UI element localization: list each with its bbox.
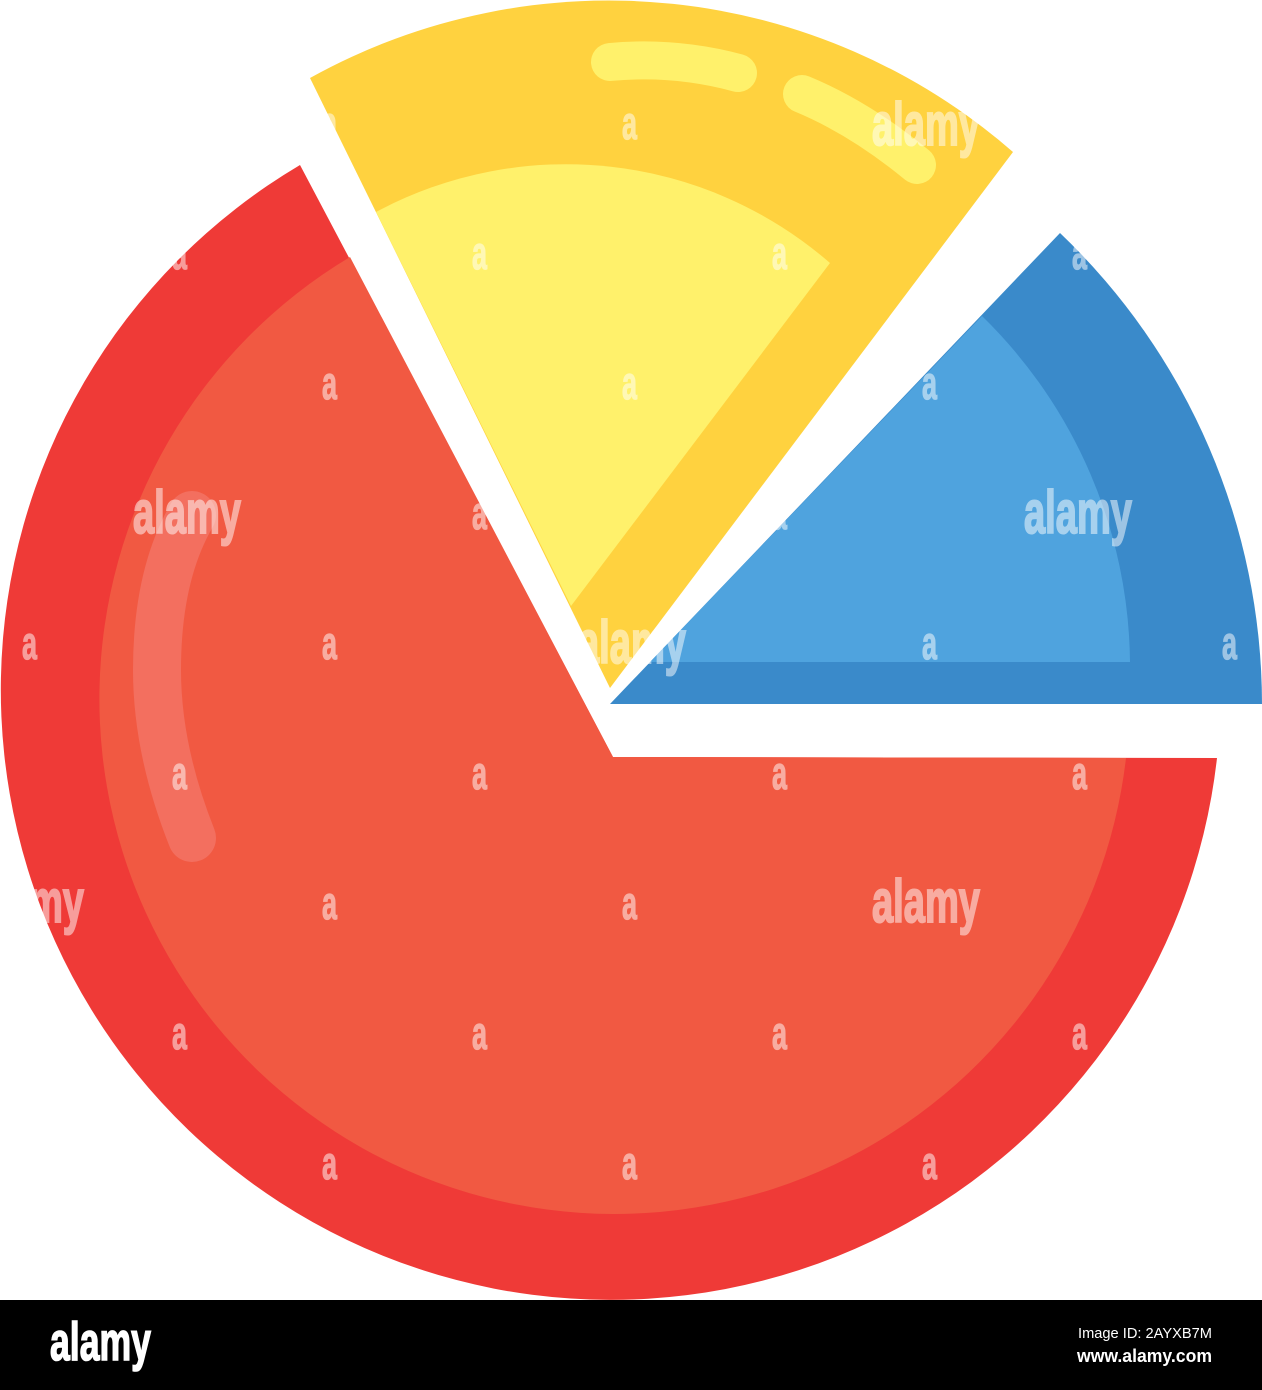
watermark text: a — [322, 617, 337, 669]
watermark text: a — [772, 747, 787, 799]
watermark text: alamy — [872, 91, 980, 158]
watermark text — [0, 91, 1237, 1189]
watermark text: a — [1222, 617, 1237, 669]
website: www.alamy.com — [1076, 1346, 1212, 1366]
watermark text: alamy — [578, 609, 686, 676]
watermark text: a — [622, 1137, 637, 1189]
yellow pie slice — [310, 1, 1013, 688]
watermark text: a — [322, 877, 337, 929]
watermark text: a — [922, 357, 937, 409]
watermark text: a — [922, 617, 937, 669]
watermark text: alamy — [133, 479, 241, 546]
footer logo: alamy — [50, 1312, 151, 1372]
watermark text: a — [172, 227, 187, 279]
watermark text: alamy — [872, 868, 980, 935]
watermark text: a — [1072, 1007, 1087, 1059]
footer bar — [0, 1300, 1262, 1390]
watermark text: a — [472, 747, 487, 799]
watermark text: a — [322, 357, 337, 409]
image id: Image ID: 2AYXB7M — [1078, 1325, 1212, 1342]
watermark text: a — [772, 1007, 787, 1059]
watermark text: a — [922, 1137, 937, 1189]
watermark text: a — [172, 1007, 187, 1059]
watermark text: a — [772, 227, 787, 279]
watermark text: a — [772, 487, 787, 539]
watermark text: a — [472, 487, 487, 539]
watermark text: a — [1072, 227, 1087, 279]
watermark text: a — [322, 97, 337, 149]
watermark text: a — [622, 97, 637, 149]
watermark text: a — [472, 227, 487, 279]
watermark text: a — [1072, 747, 1087, 799]
watermark text: a — [622, 877, 637, 929]
watermark text: alamy — [1024, 479, 1132, 546]
watermark text: a — [322, 1137, 337, 1189]
blue pie slice — [610, 233, 1262, 704]
watermark text: a — [172, 747, 187, 799]
watermark text: a — [472, 1007, 487, 1059]
red pie slice — [1, 165, 1217, 1300]
watermark text: a — [622, 357, 637, 409]
watermark text: a — [22, 617, 37, 669]
